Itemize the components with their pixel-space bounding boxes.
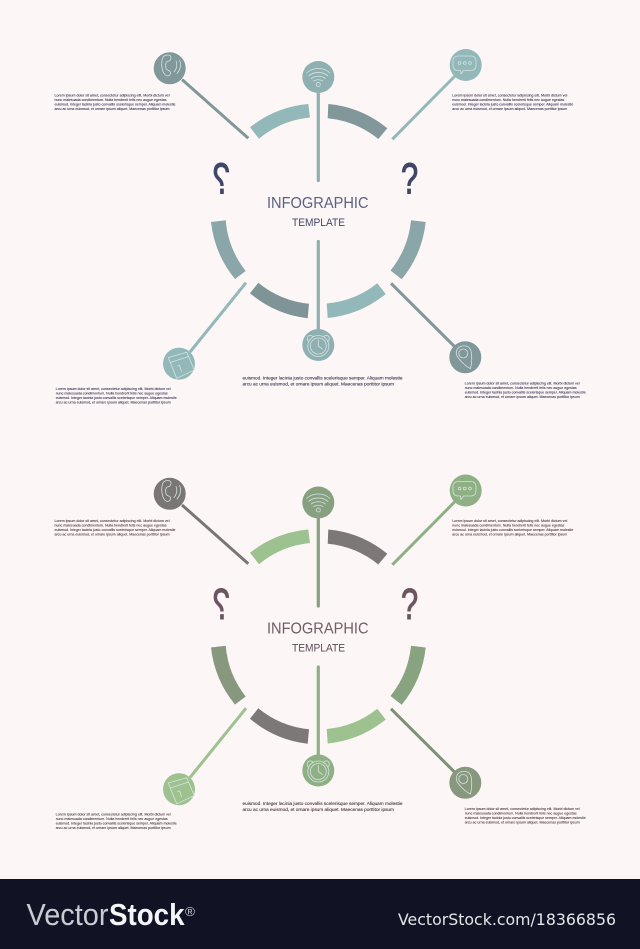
text block: top left: arcu ac urna euismod, et ornare ipsum aliquet. Maecenas porttitor ipsum <box>54 107 170 111</box>
icon: chat <box>450 474 482 506</box>
text block: bottom right: euismod. Integer lacinia justo convallis scelerisque semper. Aliquam molestie <box>465 816 586 820</box>
text block: top right: arcu ac urna euismod, et ornare ipsum aliquet. Maecenas porttitor ipsum <box>452 107 567 111</box>
icon: map pin <box>449 341 481 373</box>
logo: VectorStock <box>26 897 195 932</box>
text block: bottom centre: arcu ac urna euismod, et ornare ipsum aliquet. Maecenas porttitor ipsum <box>242 807 394 813</box>
text block: bottom centre: euismod. Integer lacinia justo convallis scelerisque semper. Aliquam molestie <box>242 801 403 807</box>
connector: clock <box>317 667 320 758</box>
text block: bottom left: euismod. Integer lacinia justo convallis scelerisque semper. Aliquam molestie <box>56 396 177 400</box>
icon: calendar <box>163 773 195 805</box>
text block: bottom left: arcu ac urna euismod, et ornare ipsum aliquet. Maecenas porttitor ipsum <box>56 826 171 830</box>
text block: bottom centre <box>242 376 403 388</box>
connector: calendar <box>190 708 246 778</box>
text block: bottom centre: euismod. Integer lacinia justo convallis scelerisque semper. Aliquam molestie <box>242 376 403 382</box>
text block: bottom right <box>465 807 586 824</box>
text block: bottom left <box>56 387 177 404</box>
icon: phone <box>154 52 186 84</box>
title: INFOGRAPHIC <box>267 195 368 212</box>
icon: wifi <box>302 61 334 93</box>
text block: top left: Lorem ipsum dolor sit amet, consectetur adipiscing elit. Morbi dictum vel <box>54 93 170 97</box>
text block: top left: Lorem ipsum dolor sit amet, consectetur adipiscing elit. Morbi dictum vel <box>54 519 170 523</box>
icon: calendar <box>163 348 195 380</box>
text block: bottom left: Lorem ipsum dolor sit amet, consectetur adipiscing elit. Morbi dictum vel <box>56 812 171 816</box>
text block: bottom right: Lorem ipsum dolor sit amet, consectetur adipiscing elit. Morbi dictum vel <box>465 382 580 386</box>
diagram: green infographic <box>54 474 586 830</box>
text block: top left: arcu ac urna euismod, et ornare ipsum aliquet. Maecenas porttitor ipsum <box>54 532 170 536</box>
subtitle: TEMPLATE <box>292 642 345 654</box>
text block: top left <box>54 93 176 111</box>
text block: top left: nunc malesuada condimentum. Nulla hendrerit felis nec augue egestas <box>54 98 167 102</box>
text block: bottom left <box>56 812 177 830</box>
logo: VectorStock: Vector <box>26 897 108 932</box>
text block: bottom left: arcu ac urna euismod, et ornare ipsum aliquet. Maecenas porttitor ipsum <box>56 400 171 404</box>
text block: bottom right: nunc malesuada condimentum. Nulla hendrerit felis nec augue egestas <box>465 386 577 390</box>
icon: chat <box>450 49 482 81</box>
arc: right <box>390 220 426 279</box>
text block: top right <box>452 93 573 111</box>
text block: top left <box>54 519 176 536</box>
arc: bottom left <box>250 708 309 744</box>
connector: clock <box>317 242 320 332</box>
arc: top left <box>250 530 310 564</box>
arc: top right <box>328 530 387 564</box>
logo: VectorStock: ® <box>185 904 195 919</box>
question mark right: ? <box>401 155 418 204</box>
text block: bottom right: arcu ac urna euismod, et ornare ipsum aliquet. Maecenas porttitor ipsum <box>465 395 580 399</box>
text block: top right: arcu ac urna euismod, et ornare ipsum aliquet. Maecenas porttitor ipsum <box>452 532 567 536</box>
text block: top left: nunc malesuada condimentum. Nulla hendrerit felis nec augue egestas <box>54 523 167 527</box>
arc: top right <box>328 104 387 139</box>
text block: bottom left: Lorem ipsum dolor sit amet, consectetur adipiscing elit. Morbi dictum vel <box>56 387 171 391</box>
arc: bottom right <box>327 283 386 318</box>
connector: wifi <box>317 516 320 606</box>
text block: bottom right <box>465 382 586 399</box>
text block: top right: Lorem ipsum dolor sit amet, consectetur adipiscing elit. Morbi dictum vel <box>452 519 567 523</box>
text block: top right: nunc malesuada condimentum. Nulla hendrerit felis nec augue egestas <box>452 523 564 527</box>
connector: pin <box>391 283 455 347</box>
arc: left <box>211 646 246 704</box>
question mark left: ? <box>213 155 230 204</box>
logo: VectorStock: Stock <box>109 897 185 932</box>
footer url: VectorStock.com/18366856 <box>398 910 616 929</box>
arc: bottom right <box>327 709 386 744</box>
icon: wifi <box>302 486 334 518</box>
question mark right: ? <box>401 581 418 629</box>
arc: right <box>390 646 426 705</box>
text block: top right: nunc malesuada condimentum. Nulla hendrerit felis nec augue egestas <box>452 98 564 102</box>
text block: top right: euismod. Integer lacinia justo convallis scelerisque semper. Aliquam molestie <box>452 102 573 106</box>
text block: bottom left: nunc malesuada condimentum. Nulla hendrerit felis nec augue egestas <box>56 392 168 396</box>
icon: clock <box>302 754 334 786</box>
text block: bottom left: nunc malesuada condimentum. Nulla hendrerit felis nec augue egestas <box>56 817 168 821</box>
icon: phone <box>154 478 186 510</box>
text block: top left: euismod. Integer lacinia justo convallis scelerisque semper. Aliquam molestie <box>54 102 176 106</box>
text block: bottom right: arcu ac urna euismod, et ornare ipsum aliquet. Maecenas porttitor ipsum <box>465 820 580 824</box>
connector: wifi <box>317 90 320 180</box>
connector: calendar <box>190 283 246 352</box>
text block: bottom right: Lorem ipsum dolor sit amet, consectetur adipiscing elit. Morbi dictum vel <box>465 807 580 811</box>
arc: bottom left <box>250 283 309 318</box>
diagram: blue-grey infographic <box>54 49 586 404</box>
connector: phone <box>182 505 248 564</box>
text block: bottom right: nunc malesuada condimentum. Nulla hendrerit felis nec augue egestas <box>465 812 577 816</box>
icon: clock <box>302 329 334 361</box>
text block: top right: euismod. Integer lacinia justo convallis scelerisque semper. Aliquam molestie <box>452 528 573 532</box>
connector: chat <box>392 76 455 139</box>
text block: top right: Lorem ipsum dolor sit amet, consectetur adipiscing elit. Morbi dictum vel <box>452 93 567 97</box>
connector: chat <box>392 502 455 565</box>
question mark left: ? <box>213 581 230 629</box>
text block: bottom centre <box>242 801 403 813</box>
subtitle: TEMPLATE <box>292 217 345 229</box>
text block: bottom right: euismod. Integer lacinia justo convallis scelerisque semper. Aliquam molestie <box>465 390 586 394</box>
arc: top left <box>250 104 310 139</box>
text block: bottom left: euismod. Integer lacinia justo convallis scelerisque semper. Aliquam molestie <box>56 822 177 826</box>
arc: left <box>211 220 246 279</box>
title: INFOGRAPHIC <box>267 620 368 638</box>
text block: top left: euismod. Integer lacinia justo convallis scelerisque semper. Aliquam molestie <box>54 528 176 532</box>
connector: pin <box>391 709 455 772</box>
footer bar <box>0 879 640 949</box>
text block: top right <box>452 519 573 536</box>
icon: map pin <box>449 767 481 799</box>
text block: bottom centre: arcu ac urna euismod, et ornare ipsum aliquet. Maecenas porttitor ipsum <box>242 382 394 388</box>
connector: phone <box>182 80 248 138</box>
